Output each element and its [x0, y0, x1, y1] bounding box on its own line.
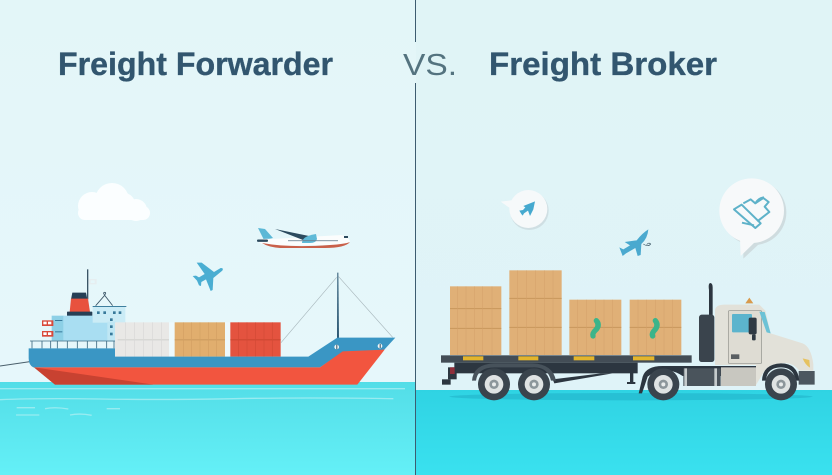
title: Freight Forwarder: Freight Forwarder — [58, 46, 333, 82]
illustration: cargo ship — [0, 269, 405, 415]
divider line — [414, 0, 416, 475]
sleeper fairing — [699, 315, 714, 362]
rear mast and flag — [87, 269, 97, 299]
bridge superstructure — [52, 306, 126, 342]
panel: freight broker background — [416, 0, 832, 475]
crate stack 2 — [509, 270, 562, 355]
water ripples — [0, 389, 405, 415]
funnel — [67, 293, 92, 316]
icon: small airplane in broker panel — [619, 229, 651, 256]
truck cab — [715, 298, 815, 385]
crate stack 3 — [569, 300, 621, 355]
front mast and rigging — [281, 273, 393, 343]
sea: left panel — [0, 382, 416, 475]
truck chassis — [639, 366, 759, 393]
icon: large speech bubble with handshake — [719, 178, 786, 259]
title: Freight Broker: Freight Broker — [489, 46, 717, 82]
ground: right panel — [416, 390, 832, 475]
deck gap — [225, 322, 230, 357]
icon: small speech bubble with airplane — [501, 190, 549, 230]
container: tan — [175, 322, 225, 357]
icon: airplane above ship — [193, 263, 223, 291]
icon: passenger airplane — [257, 228, 350, 248]
crate stack 1 — [450, 286, 501, 355]
wheel: trailer rear — [478, 368, 510, 400]
illustration: flatbed truck — [441, 270, 815, 400]
wheel: steering — [765, 368, 797, 400]
crate stack 4 — [630, 300, 681, 355]
icon: cloud — [78, 183, 150, 221]
wheel: trailer front — [518, 368, 550, 400]
green strap mark — [652, 321, 657, 336]
exhaust stack — [709, 283, 713, 315]
title: vs: VS. — [403, 47, 457, 82]
flatbed trailer — [441, 355, 692, 385]
mooring rope — [0, 362, 30, 366]
ground shadow — [449, 393, 813, 400]
container: red — [230, 322, 281, 357]
lifeboats — [42, 320, 53, 337]
container: white — [115, 322, 169, 357]
green strap mark — [593, 321, 598, 336]
deck gap — [169, 322, 175, 357]
railing — [30, 341, 115, 348]
crane frame — [96, 292, 113, 306]
wheel: tractor drive — [647, 368, 679, 400]
panel: freight forwarder background — [0, 0, 416, 475]
ship hull — [29, 338, 395, 385]
